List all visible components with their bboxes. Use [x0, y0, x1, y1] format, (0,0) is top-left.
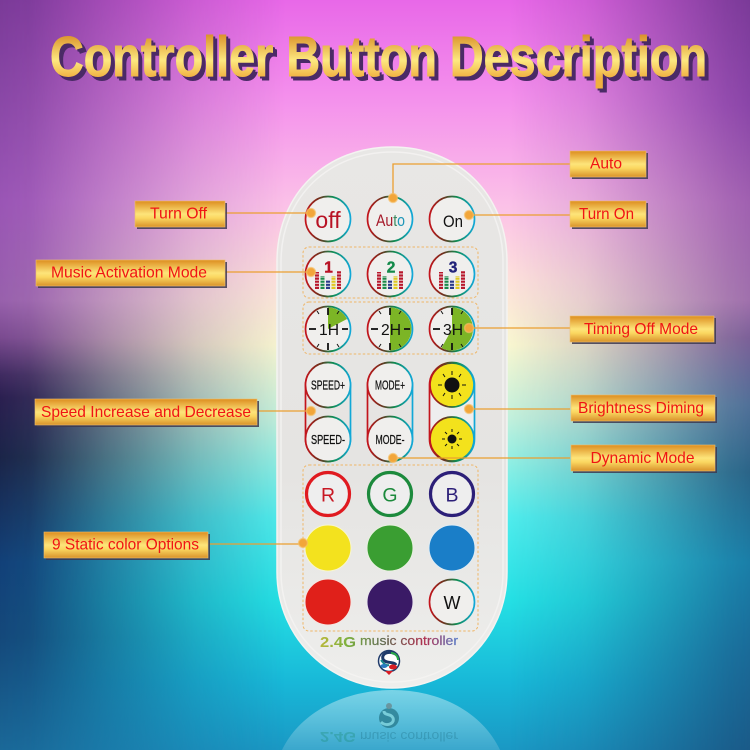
remote body — [277, 147, 507, 688]
button: W: W — [444, 593, 460, 613]
callout: Music Activation Mode — [36, 260, 316, 288]
button: G — [368, 472, 412, 516]
button: 2H timer — [368, 306, 412, 352]
callout: Timing Off Mode: Timing Off Mode — [584, 321, 698, 338]
callout: Speed Increase and Decrease — [35, 399, 316, 427]
button: 3H timer — [430, 306, 474, 352]
callout: Auto — [388, 151, 648, 202]
button: music 3: 3 — [449, 260, 458, 276]
callout: Dynamic Mode: Dynamic Mode — [590, 450, 694, 467]
button: red — [305, 579, 351, 625]
callout: 9 Static color Options: 9 Static color Options — [52, 536, 199, 554]
button: B: B — [445, 484, 459, 506]
button: yellow — [305, 525, 351, 571]
button: Auto — [368, 196, 412, 242]
button: Auto: Auto — [376, 211, 405, 230]
button: B — [430, 472, 474, 516]
callout: 9 Static color Options — [44, 532, 308, 560]
callout: Turn Off — [135, 201, 316, 229]
callout: Turn Off: Turn Off — [150, 206, 208, 222]
button pair: speed: SPEED- — [311, 433, 345, 447]
button: green — [367, 525, 413, 571]
button: off — [306, 196, 350, 242]
button: 2H timer: 2H — [381, 322, 401, 339]
button: 1H timer — [306, 306, 350, 352]
reflected brand text — [320, 728, 459, 745]
callout: Dynamic Mode — [388, 445, 717, 473]
button: 1H timer: 1H — [319, 322, 339, 339]
callout: Turn On: Turn On — [579, 206, 634, 223]
button pair: mode: MODE+ — [375, 378, 405, 392]
button: music 2 — [368, 252, 412, 296]
brand text — [320, 633, 459, 651]
button: On — [430, 196, 474, 242]
button pair: mode: MODE- — [376, 433, 404, 447]
button: purple — [367, 579, 413, 625]
callout: Turn On — [464, 201, 648, 229]
callout: Brightness Diming — [464, 395, 717, 423]
reflected logo — [379, 703, 399, 728]
button pair: speed: SPEED+ — [311, 378, 345, 392]
button: music 1: 1 — [324, 260, 333, 276]
reflected brand text: music controller — [360, 729, 459, 744]
dashed group frame: colours — [303, 465, 478, 631]
button: R — [306, 472, 350, 516]
reflected body — [282, 690, 500, 750]
dashed group frame: timers — [303, 302, 478, 354]
callout: Music Activation Mode: Music Activation Mode — [51, 264, 207, 282]
button: music 2: 2 — [387, 260, 395, 276]
button pair: brightness — [430, 362, 474, 462]
button: music 1 — [306, 252, 350, 296]
button: G: G — [382, 484, 398, 506]
dashed group frame: music — [303, 247, 478, 298]
button: music 3 — [430, 252, 474, 296]
button: off: off — [315, 207, 341, 233]
button pair: mode — [368, 362, 412, 462]
button: W — [430, 580, 474, 624]
button pair: speed — [306, 362, 350, 462]
button: blue — [429, 525, 475, 571]
callout: Timing Off Mode — [464, 316, 716, 344]
reflection of the remote — [282, 690, 500, 750]
remote control — [277, 147, 507, 688]
callout: Auto: Auto — [590, 156, 622, 172]
brand text: 2.4G — [320, 634, 356, 651]
callout: Speed Increase and Decrease: Speed Increase and Decrease — [41, 404, 251, 421]
button: 3H timer: 3H — [443, 322, 463, 339]
button: On: On — [443, 212, 463, 231]
button: R: R — [321, 484, 335, 506]
callout: Brightness Diming: Brightness Diming — [578, 400, 704, 417]
brand logo — [378, 650, 400, 675]
reflected brand text: 2.4G — [320, 728, 356, 745]
brand text: music controller — [360, 633, 459, 648]
